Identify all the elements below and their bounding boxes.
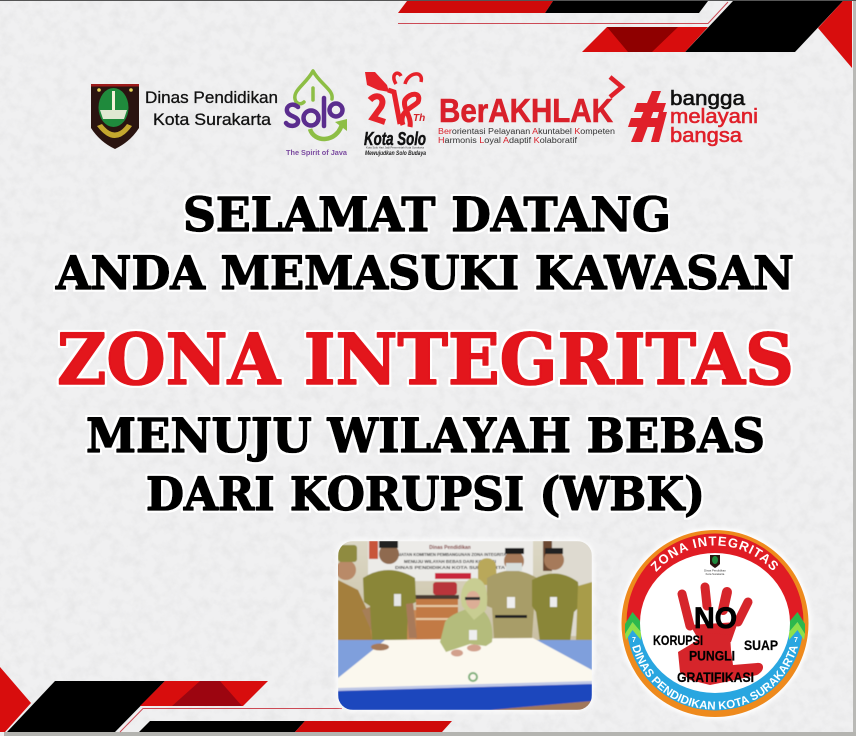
- heading: selamat datang: [55, 188, 794, 300]
- photo: signing the integrity pledge: DINAS PENDIDIKAN KOTA SURAKARTA: [395, 565, 506, 570]
- badge text: korupsi suap pungli gratifikasi: PUNGLI: [689, 648, 735, 664]
- badge text: zona integritas: ZONA INTEGRITAS: [650, 536, 778, 572]
- table: [338, 639, 592, 678]
- photo: signing the integrity pledge: [336, 539, 594, 712]
- logo: BerAKHLAK: Harmonis Loyal Adaptif Kolaboratif: [438, 136, 578, 145]
- logo: Solo The Spirit of Java: [286, 71, 348, 157]
- chevrons: 7: [632, 637, 636, 644]
- heading: menuju wilayah bebas dari korupsi: MENUJU WILAYAH BEBAS: [86, 409, 765, 464]
- left official: [338, 580, 372, 648]
- bottom-left corner decoration: [0, 667, 452, 732]
- fourth official: [532, 573, 580, 642]
- logo: Solo The Spirit of Java: The Spirit of Java: [286, 148, 348, 157]
- badge text: korupsi suap pungli gratifikasi: KORUPSI: [653, 633, 703, 648]
- logo: BerAKHLAK: [438, 77, 622, 145]
- third official: [487, 570, 540, 638]
- logo text: Dinas Pendidikan Kota Surakarta: Kota Surakarta: [153, 110, 272, 129]
- icon: small crest: Kota Surakarta: [706, 572, 725, 576]
- logo text: Dinas Pendidikan Kota Surakarta: [145, 88, 278, 129]
- badge text: korupsi suap pungli gratifikasi: SUAP: [744, 638, 778, 653]
- logo: bangga melayani bangsa: melayani: [670, 106, 758, 128]
- logo: bangga melayani bangsa: bangga: [670, 88, 746, 110]
- badge text: korupsi suap pungli gratifikasi: [653, 633, 778, 685]
- photo: signing the integrity pledge: MENUJU WILAYAH BEBAS DARI KORUPSI: [404, 559, 496, 564]
- logo: 278 Th Kota Solo: Kota Solo Hari Jadi Pemerintah Kota Surakarta: [366, 146, 424, 150]
- chevrons: 7: [794, 637, 798, 644]
- photo: signing the integrity pledge: Dinas Pendidikan: [429, 545, 471, 551]
- logo: 278 Th Kota Solo: [364, 72, 427, 157]
- heading: selamat datang: SELAMAT DATANG: [183, 188, 671, 243]
- heading: menuju wilayah bebas dari korupsi: [86, 409, 765, 521]
- logo: Dinas Pendidikan coat of arms: [91, 84, 139, 149]
- logo: 278 Th Kota Solo: Th: [413, 113, 425, 124]
- logo: BerAKHLAK: Berorientasi Pelayanan Akuntabel Kompeten: [438, 127, 615, 136]
- badge text: no: NO: [694, 602, 737, 635]
- logo: 278 Th Kota Solo: Kota Solo: [364, 129, 426, 149]
- icon: red hand: [678, 587, 763, 685]
- chevrons: [625, 612, 805, 644]
- icon: small crest: [704, 555, 726, 576]
- badge text: dinas pendidikan kota surakarta: DINAS PENDIDIKAN KOTA SURAKARTA: [632, 644, 798, 710]
- second official: [363, 570, 416, 640]
- photo: signing the integrity pledge: KEGIATAN KOMITMEN PEMBANGUNAN ZONA INTEGRITAS: [391, 552, 509, 557]
- badge: no korupsi seal: [618, 527, 811, 720]
- icon: small crest: Dinas Pendidikan: [704, 568, 726, 572]
- top-right corner decoration: [398, 1, 852, 68]
- heading: selamat datang: ANDA MEMASUKI KAWASAN: [55, 246, 794, 300]
- heading: menuju wilayah bebas dari korupsi: DARI KORUPSI (WBK): [146, 467, 705, 521]
- badge text: korupsi suap pungli gratifikasi: GRATIFIKASI: [677, 670, 754, 685]
- logo: BerAKHLAK: BerAKHLAK: [439, 92, 613, 129]
- logo text: Dinas Pendidikan Kota Surakarta: Dinas Pendidikan: [145, 88, 278, 107]
- signing woman: [440, 606, 492, 652]
- logo: 278 Th Kota Solo: Mewujudkan Solo Budaya: [365, 151, 427, 157]
- heading: zona integritas: ZONA INTEGRITAS: [57, 318, 794, 401]
- logo: bangga melayani bangsa: bangsa: [670, 125, 743, 147]
- logo: bangga melayani bangsa: [628, 88, 758, 147]
